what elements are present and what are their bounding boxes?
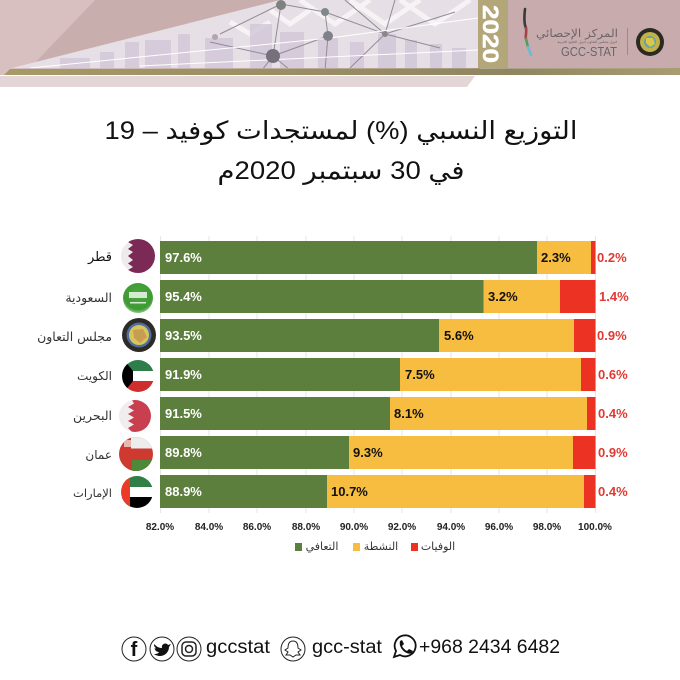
row: Oman: 89.8% (165, 445, 202, 460)
icon: Saudi flag (123, 283, 153, 313)
header pink background (0, 0, 480, 75)
row: GCC (160, 319, 627, 352)
row: Kuwait: 0.6% (598, 367, 628, 382)
icon: GCC emblem header (636, 28, 664, 56)
row: GCC: 5.6% (444, 328, 474, 343)
gold strip (4, 68, 680, 75)
row: Saudi Arabia: 1.4% (599, 289, 629, 304)
x axis labels: 98.0% (533, 522, 561, 533)
row: UAE: 88.9% (165, 484, 202, 499)
handle: gcc-stat: gcc-stat (312, 637, 383, 658)
x axis labels: 84.0% (195, 522, 223, 533)
logo ribbon (524, 9, 531, 55)
x axis labels: 96.0% (485, 522, 513, 533)
icon: Kuwait flag (122, 360, 154, 392)
title: في 30 سبتمبر 2020م (217, 157, 464, 185)
header banner (0, 0, 680, 87)
row: Saudi Arabia: 95.4% (165, 289, 202, 304)
x axis labels: 82.0% (146, 522, 174, 533)
row: UAE (160, 475, 628, 508)
icon: twitter (150, 637, 174, 661)
year block: 2020 (478, 5, 503, 63)
x axis labels: 88.0% (292, 522, 320, 533)
icon: GCC emblem (122, 318, 156, 352)
icon: instagram (177, 637, 201, 661)
country labels: قطر (87, 250, 112, 265)
row: Kuwait (160, 358, 628, 391)
icon: UAE flag (120, 476, 154, 508)
x axis labels: 92.0% (388, 522, 416, 533)
icon: whatsapp (394, 635, 416, 657)
country labels: مجلس التعاون (37, 329, 112, 345)
handle: gccstat: gccstat (206, 637, 271, 658)
icon: Oman flag (119, 437, 153, 471)
row: Bahrain: 0.4% (598, 406, 628, 421)
row: Bahrain (160, 397, 628, 430)
header skyline panel (0, 0, 478, 70)
legend: النشطة (364, 540, 398, 553)
logo panel (508, 0, 680, 68)
country labels: السعودية (65, 290, 112, 306)
row: Saudi Arabia: 3.2% (488, 289, 518, 304)
row: Oman: 9.3% (353, 445, 383, 460)
title: التوزيع النسبي (%) لمستجدات كوفيد – 19 (105, 117, 578, 146)
logo subtitle: لدول مجلس التعاون لدول الخليج العربية (557, 40, 617, 44)
row: UAE: 0.4% (598, 484, 628, 499)
row: Kuwait: 91.9% (165, 367, 202, 382)
legend (295, 540, 455, 553)
legend: الوفيات (421, 540, 455, 553)
country labels (37, 250, 112, 501)
title (105, 117, 578, 185)
row: Saudi Arabia (160, 280, 629, 313)
row: GCC: 93.5% (165, 328, 202, 343)
row: Qatar: 0.2% (597, 250, 627, 265)
chart: stacked bars (160, 236, 629, 513)
icon: Bahrain flag (118, 400, 152, 432)
footer social contacts (122, 635, 560, 661)
row: Bahrain: 91.5% (165, 406, 202, 421)
x axis labels: 94.0% (437, 522, 465, 533)
legend: التعافي (306, 540, 338, 553)
country labels: البحرين (73, 408, 112, 424)
row: Bahrain: 8.1% (394, 406, 424, 421)
row: Oman (160, 436, 628, 469)
row: Qatar: 2.3% (541, 250, 571, 265)
icon: snapchat (281, 637, 305, 661)
country labels: الإمارات (73, 486, 112, 501)
x axis labels: 100.0% (578, 522, 612, 533)
icon: Qatar flag (121, 239, 155, 273)
year block (478, 0, 508, 68)
row: Qatar: 97.6% (165, 250, 202, 265)
x axis labels (146, 522, 612, 533)
row: Qatar (160, 241, 627, 274)
country labels: الكويت (77, 369, 112, 384)
icon: facebook (122, 637, 146, 661)
row: UAE: 10.7% (331, 484, 368, 499)
x axis labels: 86.0% (243, 522, 271, 533)
logo english name: GCC-STAT (561, 45, 617, 59)
logo arabic name: المركز الإحصائي (536, 27, 618, 40)
x axis labels: 90.0% (340, 522, 368, 533)
icon: facebook: f (131, 639, 138, 661)
country labels: عمان (85, 448, 112, 462)
row: Oman: 0.9% (598, 445, 628, 460)
row: GCC: 0.9% (597, 328, 627, 343)
row: Kuwait: 7.5% (405, 367, 435, 382)
light pink strip under banner (0, 76, 475, 87)
phone number: +968 2434 6482 (419, 637, 560, 658)
